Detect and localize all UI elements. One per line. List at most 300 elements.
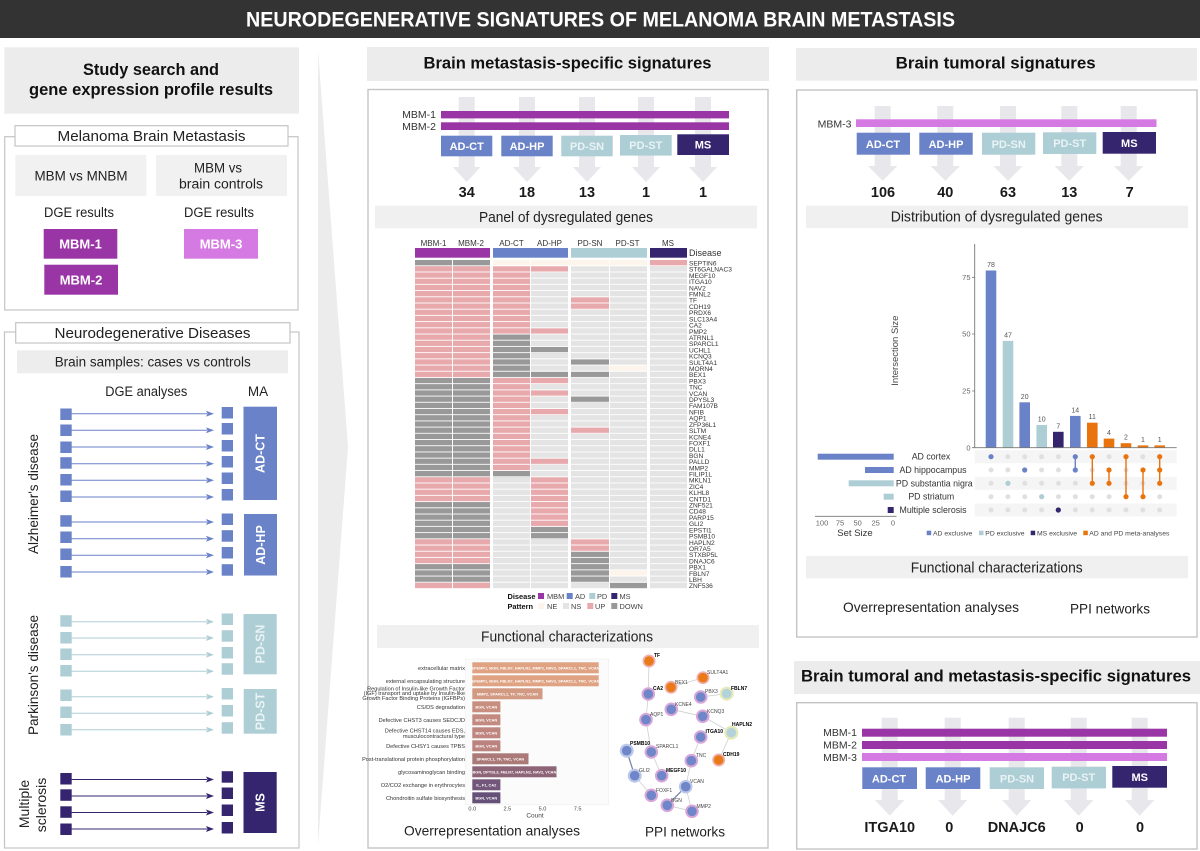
- MA box: PD-ST: [244, 689, 277, 734]
- category labels: O2/CO2 exchange in erythrocytes: [381, 783, 465, 789]
- disease colour strip: [415, 248, 722, 258]
- AD-CT box: AD-CT: [872, 774, 906, 786]
- network labels: BEX1: [675, 680, 688, 686]
- gene labels: PBX3: [689, 378, 706, 385]
- x axis: 7.5: [574, 806, 581, 812]
- heading: brain tumoral and metastasis-specific signatures: Brain tumoral and metastasis-specific signatures: [801, 668, 1191, 686]
- gene labels: SEPTIN6: [689, 260, 717, 268]
- subheading: functional characterizations: [377, 625, 759, 648]
- shared genes: 0: [1136, 820, 1144, 836]
- gene labels: CD48: [689, 509, 706, 516]
- MS box: MS: [1131, 772, 1148, 784]
- AD-HP box: [926, 767, 980, 789]
- PD-SN box: PD-SN: [1000, 774, 1034, 786]
- heading: brain metastasis-specific signatures: [367, 47, 769, 81]
- gene counts: [459, 185, 707, 201]
- network labels: CA2: [653, 686, 663, 692]
- bar gene labels: EFEMP1, BGN, FBLN7, HAPLN2, MMP2, NAV2, SPARCL1, TNC, VCAN: [472, 678, 600, 683]
- gene labels: BGN: [689, 453, 704, 460]
- MBM-1 bar: [823, 727, 1167, 739]
- intersection values: 4: [1107, 430, 1111, 437]
- AD-CT box: [441, 136, 492, 156]
- MBM-3 bar: MBM-3: [823, 752, 857, 764]
- MBM-3 box: MBM-3: [200, 236, 242, 252]
- network labels: ITGA10: [706, 729, 723, 735]
- panel: brain tumoral signatures: [797, 90, 1197, 637]
- set size axis: [815, 516, 896, 539]
- AD-CT box: AD-CT: [866, 139, 900, 151]
- heatmap legend: MS: [620, 592, 631, 601]
- PD-SN box: [982, 133, 1035, 155]
- gene labels: BEX1: [689, 372, 706, 379]
- AD-CT box: [857, 133, 910, 155]
- panel label: Melanoma Brain Metastasis: [58, 129, 246, 145]
- MBM-2 bar: MBM-2: [823, 740, 857, 752]
- MBM-3 bar: [823, 752, 1167, 764]
- heading: study search: [4, 47, 299, 114]
- gene labels: PMP2: [689, 329, 707, 336]
- MBM-3 box: [184, 229, 258, 259]
- subheading: distribution of dysregulated genes: Distribution of dysregulated genes: [891, 210, 1103, 226]
- intersection values: 1: [1158, 437, 1162, 444]
- network labels: PSMB10: [630, 741, 650, 747]
- gene labels: GLI2: [689, 521, 704, 528]
- network nodes: [620, 654, 738, 818]
- arrow: flow from left column to results: [318, 50, 348, 845]
- intersection values: 20: [1021, 394, 1029, 401]
- category labels: Growth Factor Binding Proteins (IGFBPs): [362, 696, 465, 702]
- category labels: [362, 666, 465, 802]
- MA box: PD-SN: PD-SN: [254, 625, 268, 663]
- gene labels: SLC13A4: [689, 316, 718, 323]
- MBM-2 box: [44, 265, 118, 295]
- category labels: Defective CHST14 causes EDS,: [385, 728, 465, 734]
- label: Multiple sclerosis: Multiple: [16, 780, 32, 828]
- MS box: MS: [695, 140, 711, 152]
- network labels: PBX3: [705, 689, 718, 695]
- column heading: DGE analyses: DGE analyses: [105, 384, 188, 399]
- y axis: [890, 244, 975, 452]
- gene labels: HAPLN2: [689, 540, 715, 547]
- y axis: 0: [966, 443, 970, 452]
- gene labels: ZNF521: [689, 502, 713, 510]
- gene labels: SULT4A1: [689, 360, 717, 367]
- Parkinson's DGE arrows: [60, 614, 233, 736]
- MA box: MS: MS: [254, 793, 268, 812]
- gene labels: TF: [689, 298, 697, 305]
- PD-SN box: PD-SN: [570, 141, 604, 153]
- subheading: distribution of dysregulated genes: [806, 206, 1188, 228]
- set labels: [896, 452, 973, 515]
- shared genes: DNAJC6: [988, 820, 1046, 836]
- column heading: MA: MA: [248, 384, 268, 399]
- network labels: MMP2: [696, 804, 711, 810]
- gene labels: ATRNL1: [689, 335, 714, 342]
- gene labels: FAM107B: [689, 403, 719, 410]
- network labels: GLI2: [639, 768, 650, 774]
- gene labels: CA2: [689, 323, 702, 330]
- title bar: NEURODEGENERATIVE SIGNATURES OF MELANOMA BRAIN METASTASIS: [246, 8, 955, 32]
- intersection values: 47: [1004, 332, 1012, 340]
- gene counts: 34: [459, 185, 475, 201]
- gene labels: PARP15: [689, 515, 714, 522]
- MA box: AD-HP: [244, 514, 277, 576]
- gene labels: SPARCL1: [689, 341, 719, 348]
- heatmap legend: UP: [595, 602, 605, 611]
- set labels: PD striatum: [908, 492, 954, 502]
- comparison: MBM vs MNBM: MBM vs MNBM: [34, 168, 128, 184]
- MBM-2 bar: MBM-2: [402, 121, 436, 133]
- category labels: Regulation of Insulin-like Growth Factor: [367, 686, 465, 692]
- AD-CT box: AD-CT: [450, 141, 484, 153]
- shared genes: [864, 820, 1144, 836]
- gene counts: [871, 185, 1134, 201]
- bar gene labels: BGN, VCAN: [475, 704, 497, 709]
- UpSet legend: PD exclusive: [985, 530, 1025, 538]
- heatmap legend: [508, 592, 643, 611]
- PD-ST box: PD-ST: [629, 140, 663, 152]
- network labels: TNC: [696, 753, 707, 759]
- gene labels: UCHL1: [689, 347, 711, 354]
- network labels: FBLN7: [731, 686, 747, 692]
- bars: [472, 662, 599, 803]
- intersection bars: [975, 270, 1177, 448]
- y axis: 25: [962, 387, 970, 396]
- heatmap column headers: PD-SN: [578, 239, 603, 248]
- comparison: MBM vs brain controls: brain controls: [179, 176, 263, 192]
- gene labels: FILIP1L: [689, 472, 712, 478]
- AD-CT box: [862, 767, 917, 789]
- gene counts: 1: [699, 185, 707, 201]
- gene labels: ZFP36L1: [689, 422, 716, 429]
- set labels: Multiple sclerosis: [900, 505, 967, 515]
- subheading: panel of dysregulated genes: [375, 206, 757, 228]
- gene labels: OR7A5: [689, 546, 711, 553]
- network labels: SULT4A1: [707, 670, 729, 676]
- x axis: 5.0: [539, 806, 546, 812]
- gene labels: TNC: [689, 385, 703, 392]
- intersection values: 10: [1038, 416, 1046, 424]
- gene labels: MMP2: [689, 465, 708, 472]
- gene labels: PALLD: [689, 459, 710, 466]
- caption: PPI networks: PPI networks: [1070, 602, 1150, 616]
- MA box: AD-CT: [244, 407, 277, 500]
- network labels: [630, 653, 752, 810]
- gene labels: ZIC4: [689, 484, 704, 491]
- gene labels: SLTM: [689, 428, 706, 435]
- panel: neurodegenerative diseases: [4, 323, 299, 848]
- bar gene labels: SPARCL1, TF, TNC, VCAN: [477, 756, 524, 761]
- down arrows: [868, 106, 1143, 181]
- comparison: MBM vs brain controls: MBM vs: [194, 160, 242, 176]
- MS box: [1103, 132, 1156, 154]
- heading: brain tumoral signatures: [796, 48, 1197, 81]
- gene counts: 1: [642, 185, 650, 201]
- AD-HP box: AD-HP: [936, 774, 970, 786]
- down arrows: [875, 718, 1154, 816]
- MBM-1 box: [44, 229, 117, 259]
- category labels: (IGF) transport and uptake by Insulin-like: [364, 691, 465, 697]
- gene labels: PBX1: [689, 565, 706, 572]
- MBM-1 bar: MBM-1: [402, 109, 436, 121]
- AD-HP box: AD-HP: [510, 141, 544, 153]
- gene labels: ST6GALNAC3: [689, 267, 732, 274]
- UpSet legend: AD exclusive: [933, 530, 973, 538]
- label: Parkinson's disease: Parkinson's disease: [25, 615, 41, 735]
- gene labels: KLHL8: [689, 490, 709, 497]
- heatmap column headers: MBM-1: [421, 239, 447, 248]
- MBM-3 bar: [818, 118, 1156, 130]
- gene labels: NAV2: [689, 285, 706, 292]
- gene counts: 18: [519, 185, 535, 201]
- heatmap legend: Pattern: [508, 602, 533, 611]
- intersection values: 1: [1141, 437, 1145, 444]
- network labels: CDH19: [723, 752, 740, 758]
- set labels: AD hippocampus: [900, 465, 967, 475]
- UpSet plot: [815, 244, 1177, 539]
- panel label: [16, 323, 290, 343]
- set size bars: [818, 454, 894, 513]
- MBM-1 bar: MBM-1: [823, 727, 857, 739]
- multiple sclerosis DGE arrows: [60, 771, 233, 835]
- panel: brain tumoral and metastasis-specific signatures: [797, 703, 1197, 849]
- intersection values: [987, 262, 1162, 444]
- panel label: [15, 126, 288, 146]
- UpSet legend: [927, 530, 1170, 538]
- gene labels: PRDX6: [689, 310, 711, 317]
- category labels: Defective CHST3 causes SEDCJD: [379, 718, 465, 724]
- title bar: [0, 0, 1200, 38]
- category labels: glycosaminoglycan binding: [398, 770, 465, 776]
- gene counts: 13: [1061, 185, 1077, 201]
- PD-SN box: PD-SN: [992, 139, 1026, 151]
- comparison: MBM vs brain controls: [156, 155, 287, 196]
- category labels: extracellular matrix: [418, 666, 465, 672]
- intersection values: 78: [987, 262, 995, 269]
- MA box: PD-ST: PD-ST: [254, 692, 268, 730]
- heatmap legend: AD: [575, 592, 585, 601]
- set labels: PD substantia nigra: [896, 478, 973, 488]
- heatmap legend: Disease: [508, 592, 535, 601]
- MBM-1 bar: [402, 109, 729, 121]
- x axis: 2.5: [504, 806, 511, 812]
- gene labels: KCNQ3: [689, 354, 712, 361]
- AD-HP box: [919, 133, 973, 155]
- PD-SN box: [990, 767, 1044, 789]
- heatmap column headers: AD-CT: [499, 239, 524, 248]
- gene labels: MEGF10: [689, 273, 716, 280]
- MA box: MS: [244, 772, 277, 833]
- caption: overrepresentation analyses: Overrepresentation analyses: [843, 599, 1019, 615]
- MS box: [1112, 766, 1167, 788]
- gene labels: VCAN: [689, 391, 708, 398]
- bar gene labels: BGN, DPYSL3, FBLN7, HAPLN2, NAV2, VCAN: [472, 769, 556, 774]
- UpSet legend: MS exclusive: [1037, 530, 1077, 538]
- intersection values: 14: [1071, 407, 1079, 414]
- bar gene labels: MMP2, SPARCL1, TF, TNC, VCAN: [477, 691, 538, 696]
- label: Multiple sclerosis: sclerosis: [33, 778, 49, 832]
- MA box: AD-HP: AD-HP: [254, 525, 268, 565]
- sample description: Brain samples: cases vs controls: [55, 354, 251, 370]
- caption: overrepresentation analyses: Overrepresentation analyses: [404, 822, 580, 838]
- heading: brain tumoral and metastasis-specific signatures: [794, 661, 1200, 694]
- MS box: [677, 134, 729, 155]
- gene labels: ITGA10: [689, 279, 712, 286]
- network labels: TF: [654, 653, 660, 659]
- MBM-2 bar: [402, 121, 729, 133]
- set labels: AD cortex: [912, 452, 951, 462]
- MBM-2 box: MBM-2: [60, 272, 102, 288]
- heading: study search: gene expression profile results: [29, 81, 273, 99]
- subheading: functional characterizations: Functional characterizations: [911, 560, 1083, 576]
- x axis: Count: [526, 812, 544, 820]
- set size axis: 100: [816, 518, 828, 528]
- AD-HP box: [501, 136, 553, 156]
- heading: brain tumoral signatures: Brain tumoral signatures: [896, 54, 1096, 72]
- subheading: functional characterizations: [806, 556, 1188, 578]
- set size axis: 25: [872, 518, 880, 528]
- heatmap column headers: [421, 239, 674, 248]
- MA box: PD-SN: [244, 614, 277, 674]
- heatmap column headers: MBM-2: [458, 239, 484, 248]
- network labels: HAPLN2: [732, 722, 752, 728]
- comparison: MBM vs MNBM: [15, 155, 146, 196]
- gene counts: 63: [1000, 185, 1016, 201]
- shared genes: ITGA10: [864, 820, 915, 836]
- set size axis: Set Size: [837, 528, 873, 539]
- DGE results left: DGE results: [44, 205, 114, 220]
- gene labels: MORN4: [689, 366, 713, 373]
- PD-ST box: [1043, 132, 1096, 154]
- y axis: 75: [962, 273, 970, 282]
- heatmap column headers: PD-ST: [616, 239, 640, 248]
- gene labels: CDH19: [689, 304, 711, 311]
- gene labels: EPSTI1: [689, 527, 712, 534]
- intersection values: 2: [1124, 435, 1128, 442]
- network labels: SPARCL1: [656, 744, 679, 750]
- heatmap: [415, 239, 732, 611]
- intersection values: 11: [1089, 414, 1096, 421]
- PD-ST box: [620, 135, 672, 156]
- category labels: Post-translational protein phosphorylation: [362, 757, 465, 763]
- gene labels: ZNF536: [689, 583, 713, 590]
- gene labels: [689, 260, 732, 590]
- set size axis: 0: [891, 518, 895, 528]
- bar gene labels: EFEMP1, BGN, FBLN7, HAPLN2, MMP2, NAV2, SPARCL1, TNC, VCAN: [472, 665, 600, 670]
- category labels: Defective CHSY1 causes TPBS: [386, 744, 465, 750]
- panel: melanoma brain metastasis: [5, 126, 298, 310]
- gene labels: LBH: [689, 577, 702, 584]
- PD-ST box: [1052, 767, 1106, 788]
- gene counts: 106: [871, 185, 895, 201]
- intersection matrix: [975, 450, 1177, 516]
- heatmap column headers: MS: [662, 239, 674, 248]
- gene labels: FMNL2: [689, 292, 711, 298]
- PD-SN box: [561, 136, 613, 156]
- heatmap cells: [415, 260, 687, 589]
- x axis: 0.0: [468, 806, 476, 812]
- bar gene labels: BGN, VCAN: [475, 795, 497, 800]
- gene labels: FBLN7: [689, 571, 710, 578]
- heading: brain metastasis-specific signatures: Brain metastasis-specific signatures: [424, 54, 712, 72]
- PD-ST box: PD-ST: [1062, 772, 1095, 784]
- network labels: AQP1: [650, 712, 664, 718]
- heatmap legend: NS: [571, 602, 581, 611]
- disease colour strip: Disease: [689, 248, 722, 258]
- x axis: [468, 806, 581, 820]
- Alzheimer's DGE arrows: [60, 407, 233, 578]
- bar gene labels: BGN, VCAN: [475, 743, 497, 748]
- network labels: KCNQ3: [707, 709, 724, 715]
- MBM-3 bar: MBM-3: [818, 118, 852, 130]
- bar gene labels: IL, F1, CA2: [476, 782, 497, 787]
- bar gene labels: BGN, VCAN: [475, 717, 497, 722]
- subheading: functional characterizations: Functional characterizations: [481, 630, 653, 646]
- network labels: BGN: [671, 798, 682, 804]
- gene labels: DPYSL3: [689, 397, 715, 404]
- gene labels: NFIB: [689, 409, 705, 416]
- bar chart: overrepresentation analyses: [362, 659, 609, 820]
- gene labels: CNTD1: [689, 496, 711, 503]
- gene counts: 40: [937, 185, 953, 201]
- sample description: [17, 350, 288, 373]
- label: Alzheimer's disease: Alzheimer's disease: [25, 434, 41, 554]
- network edges: [627, 661, 731, 811]
- set size axis: 75: [836, 518, 844, 528]
- PD-ST box: PD-ST: [1053, 138, 1086, 150]
- MS box: MS: [1121, 138, 1138, 150]
- category labels: musculocontractural type: [403, 734, 465, 740]
- panel label: Neurodegenerative Diseases: [54, 326, 250, 342]
- gene counts: 13: [579, 185, 595, 201]
- MA box: AD-CT: AD-CT: [254, 434, 268, 473]
- gene counts: 7: [1126, 185, 1134, 201]
- shared genes: 0: [1076, 820, 1084, 836]
- heatmap column headers: AD-HP: [537, 239, 562, 248]
- heading: study search: Study search and: [83, 61, 219, 79]
- network labels: MEGF10: [666, 768, 686, 774]
- down arrows: [453, 97, 717, 182]
- MBM-1 box: MBM-1: [59, 236, 102, 252]
- y axis: Intersection Size: [890, 316, 901, 386]
- y axis: 50: [962, 330, 970, 339]
- subheading: panel of dysregulated genes: Panel of dysregulated genes: [479, 209, 653, 226]
- bar gene labels: BGN, VCAN: [475, 730, 497, 735]
- PPI network: [620, 653, 752, 818]
- gene labels: STXBP5L: [689, 552, 718, 559]
- category labels: Chondroitin sulfate biosynthesis: [386, 796, 465, 802]
- gene labels: DLL1: [689, 447, 705, 454]
- gene labels: MKLN1: [689, 478, 711, 485]
- gene labels: DNAJC6: [689, 558, 715, 565]
- shared genes: 0: [945, 820, 953, 836]
- gene labels: PSMB10: [689, 534, 715, 541]
- gene labels: FOXF1: [689, 440, 711, 448]
- bar gene labels: [472, 665, 600, 800]
- set size axis: 50: [854, 518, 862, 528]
- UpSet legend: AD and PD meta-analyses: [1089, 530, 1170, 538]
- heatmap legend: MBM: [547, 592, 564, 601]
- intersection values: 7: [1056, 423, 1060, 430]
- heatmap legend: DOWN: [620, 602, 643, 611]
- network labels: KCNE4: [675, 702, 692, 708]
- AD-HP box: AD-HP: [929, 139, 963, 151]
- network labels: FOXF1: [656, 788, 672, 794]
- category labels: CS/DS degradation: [417, 705, 465, 711]
- gene labels: KCNE4: [689, 434, 711, 441]
- DGE results right: DGE results: [184, 205, 254, 220]
- category labels: external encapsulating structure: [386, 679, 465, 685]
